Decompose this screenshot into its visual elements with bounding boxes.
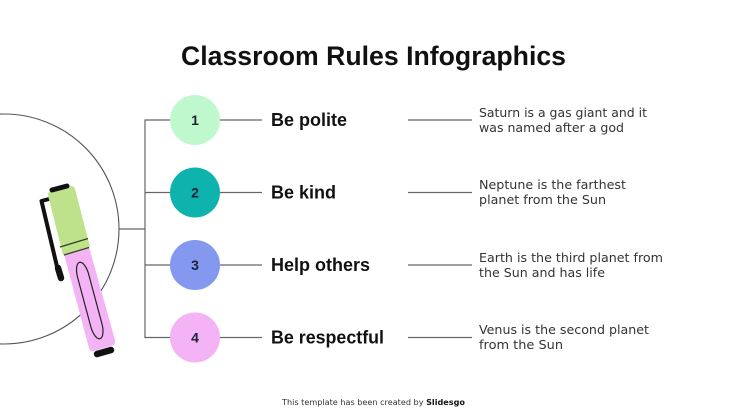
icon: marker pen [42, 186, 115, 354]
background circle [0, 114, 119, 344]
number badge 1 [170, 95, 220, 145]
connector tree [119, 120, 170, 338]
number badge 4 [170, 312, 220, 362]
number badge 3: 3 [191, 257, 199, 273]
number badge 2: 2 [191, 184, 199, 200]
row 3 [170, 240, 663, 290]
description 2: Neptune is the farthest [479, 178, 626, 192]
heading: Be polite: Be polite [271, 110, 347, 130]
heading: Help others: Help others [271, 255, 370, 275]
number badge 2 [170, 168, 220, 218]
number badge 4: 4 [191, 330, 199, 346]
heading: Be kind: Be kind [271, 182, 336, 202]
description 4: from the Sun [479, 338, 563, 352]
description 1: Saturn is a gas giant and it [479, 106, 647, 120]
heading: Be respectful: Be respectful [271, 328, 384, 348]
description 3: the Sun and has life [479, 266, 605, 280]
description 3: Earth is the third planet from [479, 251, 663, 265]
footer credit: This template has been created by Slidesgo [281, 398, 466, 407]
number badge 1: 1 [191, 112, 199, 128]
row 4 [170, 312, 649, 362]
row 2 [170, 168, 626, 218]
row 1 [170, 95, 647, 145]
description 4: Venus is the second planet [479, 323, 649, 337]
description 2: planet from the Sun [479, 193, 606, 207]
number badge 3 [170, 240, 220, 290]
description 1: was named after a god [479, 121, 624, 135]
title: Classroom Rules Infographics [181, 41, 566, 71]
